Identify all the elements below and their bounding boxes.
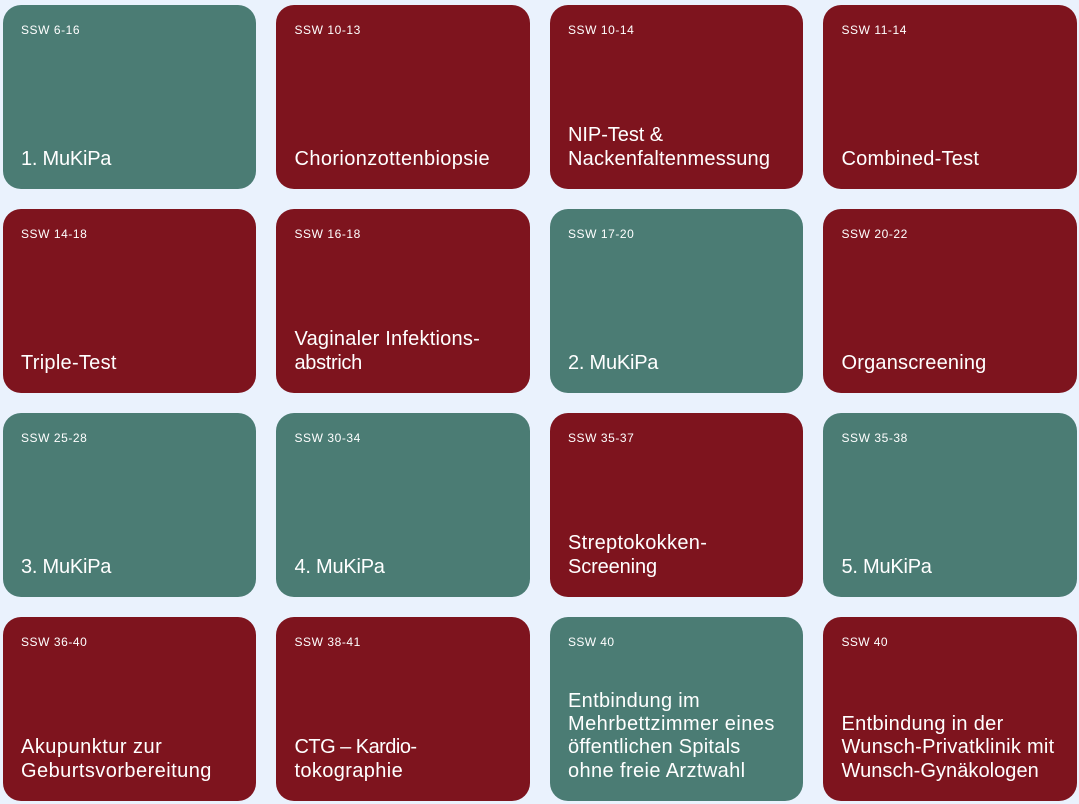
card: Combined-Test — [823, 5, 1077, 189]
card: CTG: tokographie — [294, 760, 403, 782]
card: Triple-Test — [3, 209, 256, 393]
card: Entbindung in der Wunsch-Privatklinik: Entbindung in der — [842, 713, 1004, 735]
card: Entbindung im Mehrbettzimmer: SSW 40 — [568, 635, 614, 649]
card: CTG — [276, 617, 530, 801]
card: 1. MuKiPa — [3, 5, 256, 189]
card: Organscreening: Organscreening — [842, 352, 986, 374]
card: Triple-Test: Triple-Test — [21, 352, 117, 374]
card: Organscreening — [823, 209, 1077, 393]
card: 3. MuKiPa: 3. MuKiPa — [21, 556, 111, 578]
card: Akupunktur — [3, 617, 256, 801]
card: Entbindung im Mehrbettzimmer: Entbindung im — [568, 690, 700, 712]
card: Entbindung in der Wunsch-Privatklinik: Wunsch-Gynäkologen — [842, 760, 1039, 782]
card: CTG: SSW 38-41 — [294, 635, 361, 649]
card: Entbindung in der Wunsch-Privatklinik — [823, 617, 1077, 801]
card: 1. MuKiPa: SSW 6-16 — [21, 23, 80, 37]
card: Streptokokken-Screening — [550, 413, 803, 597]
card: Entbindung in der Wunsch-Privatklinik: SSW 40 — [842, 635, 888, 649]
card: Akupunktur: SSW 36-40 — [21, 635, 87, 649]
card: 3. MuKiPa: SSW 25-28 — [21, 431, 87, 445]
card: 2. MuKiPa: SSW 17-20 — [568, 227, 634, 241]
card: Entbindung in der Wunsch-Privatklinik: Wunsch-Privatklinik mit — [842, 736, 1055, 758]
card: Entbindung im Mehrbettzimmer — [550, 617, 803, 801]
card: 2. MuKiPa — [550, 209, 803, 393]
card: Combined-Test: SSW 11-14 — [842, 23, 907, 37]
card: Chorionzottenbiopsie — [276, 5, 530, 189]
card: Vaginaler Infektionsabstrich: SSW 16-18 — [294, 227, 361, 241]
card: 4. MuKiPa: SSW 30-34 — [294, 431, 361, 445]
card: 5. MuKiPa — [823, 413, 1077, 597]
card: 3. MuKiPa — [3, 413, 256, 597]
card: Vaginaler Infektionsabstrich: abstrich — [294, 352, 362, 374]
card: NIP-Test — [550, 5, 803, 189]
card: Streptokokken-Screening: Streptokokken- — [568, 532, 707, 554]
card: 2. MuKiPa: 2. MuKiPa — [568, 352, 658, 374]
card: NIP-Test: NIP-Test & — [568, 124, 663, 146]
card: Vaginaler Infektionsabstrich: Vaginaler Infektions- — [294, 328, 480, 350]
card: Streptokokken-Screening: Screening — [568, 556, 657, 578]
card: Entbindung im Mehrbettzimmer: ohne freie Arztwahl — [568, 760, 746, 782]
card: Akupunktur: Geburtsvorbereitung — [21, 760, 212, 782]
card: Entbindung im Mehrbettzimmer: öffentlichen Spitals — [568, 736, 741, 758]
card: NIP-Test: Nackenfaltenmessung — [568, 148, 770, 170]
card: Vaginaler Infektionsabstrich — [276, 209, 530, 393]
card: Combined-Test: Combined-Test — [842, 148, 979, 170]
card: Chorionzottenbiopsie: SSW 10-13 — [294, 23, 361, 37]
card: 4. MuKiPa — [276, 413, 530, 597]
card: 1. MuKiPa: 1. MuKiPa — [21, 148, 111, 170]
card: 5. MuKiPa: SSW 35-38 — [842, 431, 908, 445]
card: Entbindung im Mehrbettzimmer: Mehrbettzimmer eines — [568, 713, 775, 735]
card: Chorionzottenbiopsie: Chorionzottenbiopsie — [294, 148, 490, 170]
card: 4. MuKiPa: 4. MuKiPa — [294, 556, 385, 578]
card: 5. MuKiPa: 5. MuKiPa — [842, 556, 932, 578]
card: Streptokokken-Screening: SSW 35-37 — [568, 431, 634, 445]
card: Triple-Test: SSW 14-18 — [21, 227, 87, 241]
card: CTG: CTG – Kardio- — [294, 736, 417, 758]
card: NIP-Test: SSW 10-14 — [568, 23, 634, 37]
card: Organscreening: SSW 20-22 — [842, 227, 908, 241]
card: Akupunktur: Akupunktur zur — [21, 736, 162, 758]
